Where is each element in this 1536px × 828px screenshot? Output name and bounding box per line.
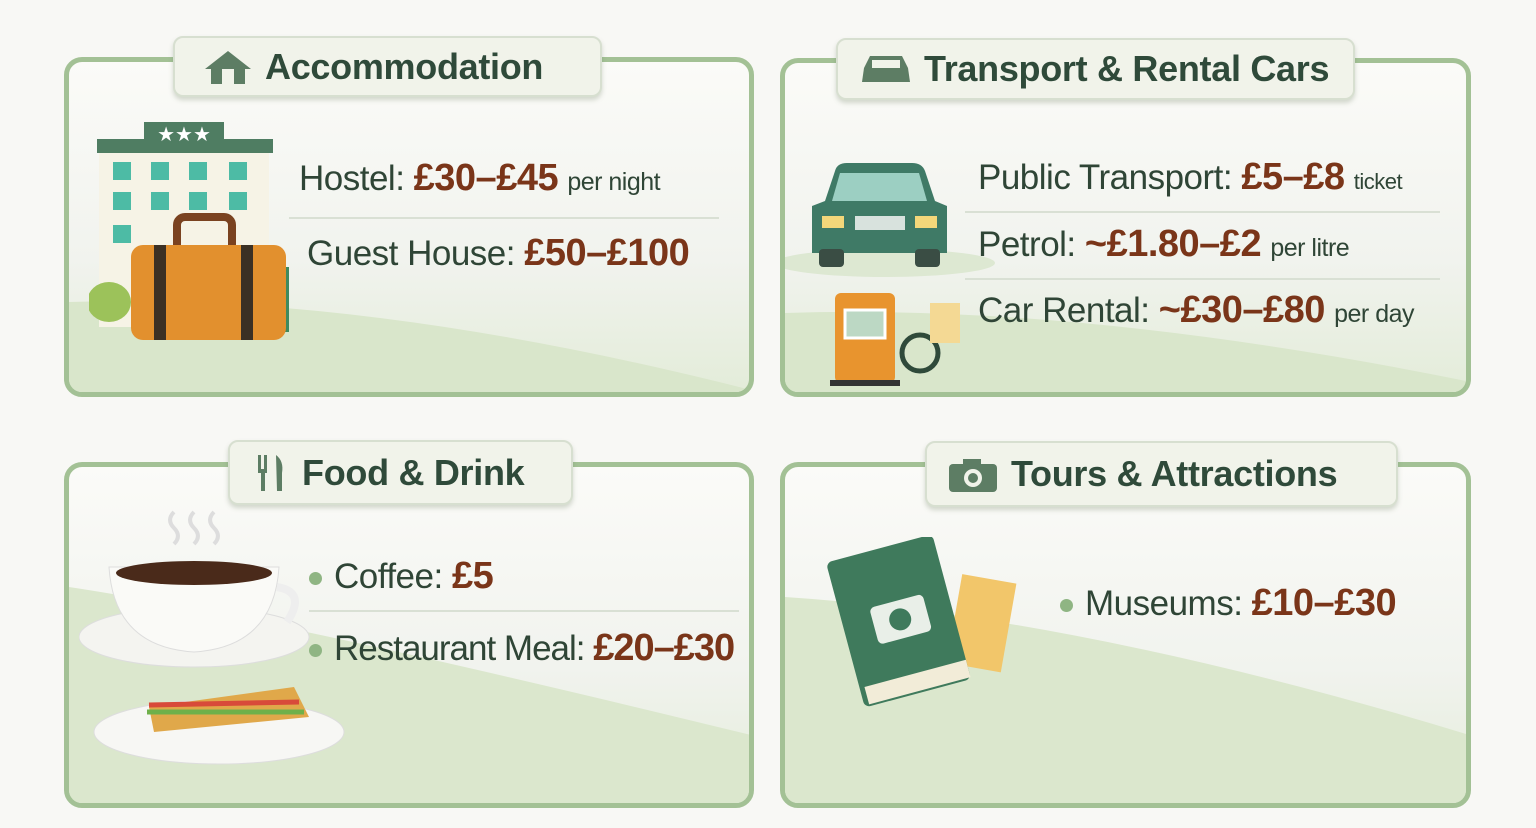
heading: tours — [925, 441, 1398, 507]
icon: hotel and suitcase — [89, 122, 289, 340]
text: restaurant meal: Restaurant Meal: £20–£30 — [334, 627, 734, 669]
text: public transport: Public Transport: £5–£8 ticket — [978, 156, 1402, 198]
icon: coffee and sandwich — [79, 510, 344, 764]
heading: accommodation: Accommodation — [265, 46, 543, 86]
heading: food: Food & Drink — [302, 452, 524, 492]
panel: food — [64, 462, 754, 808]
heading: accommodation — [173, 36, 602, 97]
icon: guidebook and tickets — [827, 537, 1016, 706]
text: hostel: Hostel: £30–£45 per night — [299, 157, 660, 199]
icon: car — [812, 163, 947, 267]
panel: accommodation — [64, 57, 754, 397]
panel: transport — [780, 58, 1471, 397]
icon: petrol pump — [830, 293, 960, 386]
heading: transport: Transport & Rental Cars — [924, 48, 1329, 89]
text: coffee: Coffee: £5 — [334, 555, 493, 597]
heading: tours: Tours & Attractions — [1011, 453, 1337, 494]
text: car rental: Car Rental: ~£30–£80 per day — [978, 289, 1414, 331]
text: museums: Museums: £10–£30 — [1085, 582, 1396, 624]
icon: hotel and suitcase: ★★★ — [157, 124, 211, 146]
heading: food — [228, 440, 573, 505]
panel: tours — [780, 462, 1471, 808]
text: petrol: Petrol: ~£1.80–£2 per litre — [978, 223, 1349, 265]
text: guest house: Guest House: £50–£100 — [307, 232, 689, 274]
heading: transport — [836, 38, 1355, 100]
